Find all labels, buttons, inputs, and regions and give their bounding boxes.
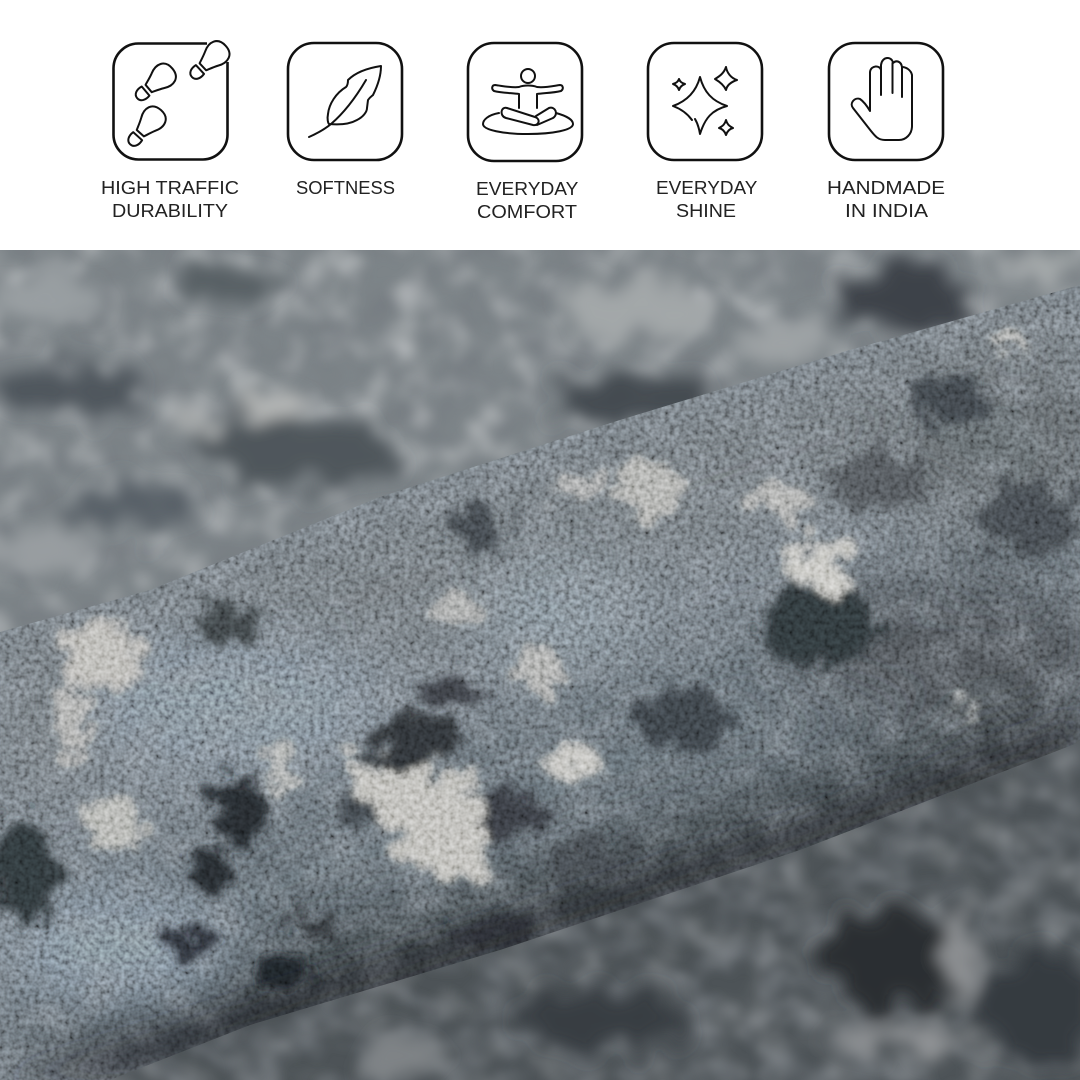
dark patches xyxy=(212,777,268,853)
icon: high traffic durability xyxy=(113,37,234,160)
label: high traffic durability: DURABILITY xyxy=(112,201,228,221)
rolled rug body xyxy=(0,250,1080,1080)
label: high traffic durability: HIGH TRAFFIC xyxy=(101,178,239,198)
white header panel xyxy=(0,0,1080,250)
rug background blurred top xyxy=(0,250,1080,632)
label: everyday shine: SHINE xyxy=(676,201,736,221)
label: softness: SOFTNESS xyxy=(296,178,395,198)
icon: softness feather xyxy=(288,43,402,160)
icon: everyday shine sparkles xyxy=(648,43,762,160)
rug foreground blurred bottom xyxy=(110,742,1080,1080)
icon: everyday comfort meditating figure xyxy=(468,43,582,161)
label: everyday comfort: COMFORT xyxy=(477,202,577,222)
label: everyday shine: EVERYDAY xyxy=(656,178,757,198)
light patches xyxy=(60,621,140,689)
wool pile texture xyxy=(0,250,1080,1080)
icon box with gap xyxy=(113,43,228,160)
label: everyday comfort: EVERYDAY xyxy=(476,179,578,199)
label: handmade in india: HANDMADE xyxy=(827,178,945,198)
roll bottom shadow xyxy=(0,715,1080,1080)
label: handmade in india: IN INDIA xyxy=(845,201,928,221)
icon: handmade hand xyxy=(829,43,943,160)
icon: footprints xyxy=(121,37,234,152)
